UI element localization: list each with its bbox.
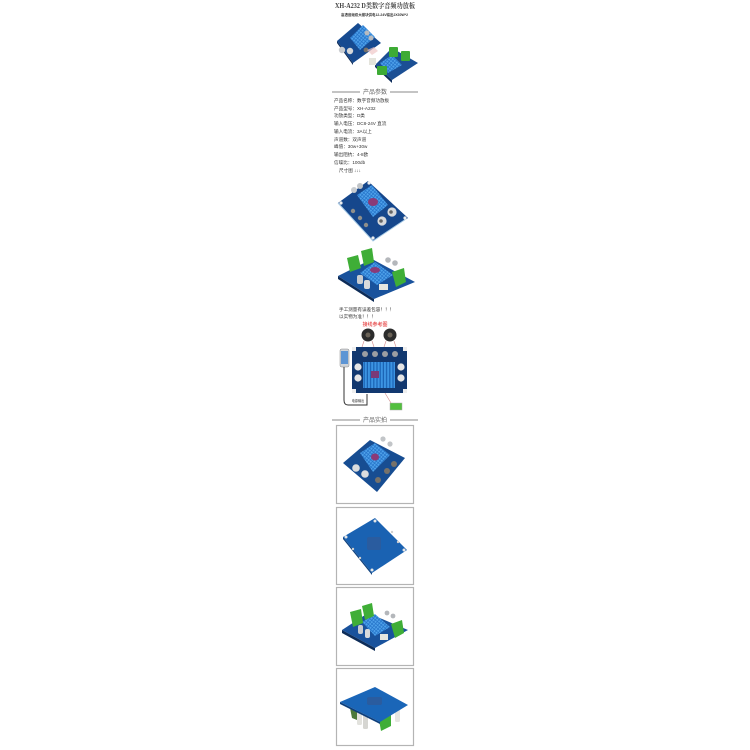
dimension photo of board (338, 181, 408, 241)
photo frame 4: tilted underside (336, 668, 414, 746)
handmade measurement note: 以实物为准！！！ (339, 313, 376, 320)
title: XH-A232 D类数字音频功放板 (335, 1, 415, 10)
specification list: 信噪比：100db (334, 159, 366, 166)
section divider: product photos: 产品实拍 (363, 416, 387, 424)
photo frame 1: top of board (336, 426, 414, 504)
icon: phone (340, 349, 349, 367)
board top view (352, 347, 407, 393)
product hero photo (337, 23, 418, 83)
specification list: 功放类型：D类 (334, 112, 365, 119)
specification list: 产品型号：XH-A232 (334, 105, 376, 112)
specification list: 产品名称：数字音频功放板 (334, 97, 390, 104)
specification list: 输入电流：3A以上 (334, 128, 372, 135)
angled photo with green terminals (338, 248, 415, 302)
specification list: 输入电压：DC8-24V 直流 (334, 120, 387, 127)
power label: 电源输出 (352, 398, 364, 403)
handmade measurement note: 手工测量有误差包容！！！ (339, 306, 394, 313)
section divider: product parameters: 产品参数 (363, 88, 387, 96)
photo frame 2: underside of board (336, 508, 414, 584)
specification list (334, 97, 390, 174)
audio cable (344, 367, 367, 405)
specification list: 峰值：30w+30w (334, 143, 368, 150)
speaker leads (362, 341, 396, 347)
icon: right speaker (384, 328, 396, 342)
power input module (385, 393, 402, 410)
specification list: 尺寸图 (339, 167, 353, 174)
specification list: 声道数：双声道 (334, 136, 367, 143)
handmade measurement note (339, 306, 394, 320)
specification list: 输出阻抗：4-8欧 (334, 151, 369, 158)
wiring heading: 接线参考图 (362, 321, 388, 328)
icon: left speaker (362, 328, 374, 342)
section divider: product photos (332, 416, 418, 424)
specification list: ↓↓↓ (354, 168, 361, 173)
subtitle: 高清音频双大模块供电12-24V输出2X30W*2 (341, 12, 408, 17)
photo frame 3: board with terminals (336, 588, 414, 666)
section divider: product parameters (332, 88, 418, 96)
wiring diagram (340, 328, 407, 410)
